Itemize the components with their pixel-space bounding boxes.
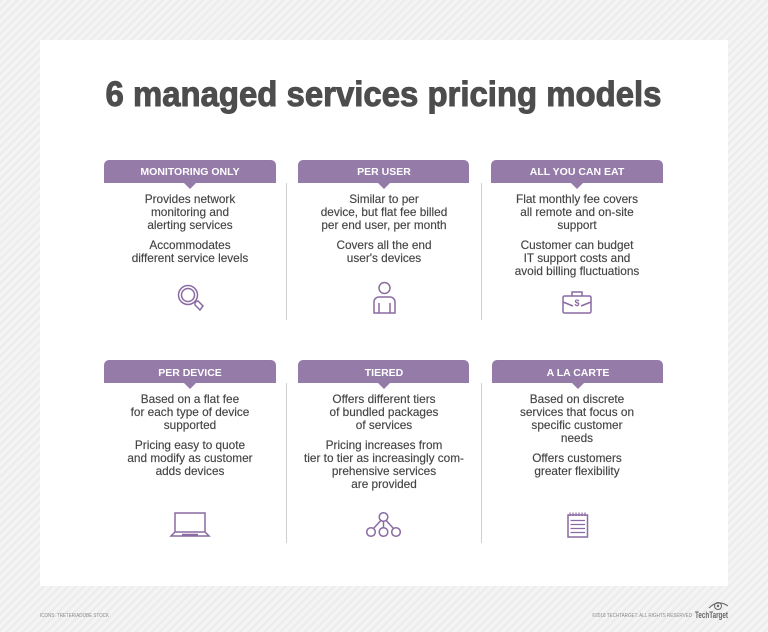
text: all you can eat: support (557, 218, 597, 232)
text: monitoring only: alerting services (147, 218, 233, 232)
logo: TechTarget (695, 602, 729, 621)
text: monitoring only (132, 192, 248, 265)
text: per device: for each type of device (131, 405, 250, 419)
panel: tiered (298, 360, 469, 536)
panel: all you can eat (491, 160, 663, 313)
header: per device: PER DEVICE (158, 367, 222, 379)
icon: laptop (171, 513, 209, 536)
text: monitoring only: Accommodates (149, 238, 231, 252)
header: all you can eat: ALL YOU CAN EAT (530, 166, 625, 178)
text: tiered: Offers different tiers (332, 392, 436, 406)
text: a la carte (520, 392, 634, 478)
icon: notepad (568, 512, 588, 537)
credit: copyright: ©2018 TECHTARGET. ALL RIGHTS RESERVED (592, 612, 692, 619)
logo: TechTarget: TechTarget (695, 610, 729, 621)
text: per user (321, 192, 447, 265)
icon: hierarchy (367, 513, 400, 536)
text: per device: Pricing easy to quote (135, 438, 246, 452)
text: tiered: Pricing increases from (326, 438, 443, 452)
header: tiered (298, 360, 469, 389)
panel: per device (104, 360, 276, 536)
text: a la carte: needs (561, 431, 593, 445)
text: tiered (304, 392, 464, 491)
header: monitoring only: MONITORING ONLY (140, 166, 240, 178)
title: 6 managed services pricing models (106, 75, 662, 114)
header: all you can eat (491, 160, 663, 189)
text: per user: user's devices (347, 251, 421, 265)
text: tiered: tier to tier as increasingly com- (304, 451, 464, 465)
text: a la carte: Based on discrete (530, 392, 625, 406)
icon: person (374, 282, 395, 313)
panel: main card (40, 40, 728, 586)
header: per user (298, 160, 469, 189)
panel: a la carte (492, 360, 663, 537)
text: monitoring only: different service levels (132, 251, 248, 265)
header: tiered: TIERED (365, 367, 404, 379)
text: monitoring only: monitoring and (151, 205, 229, 219)
text: all you can eat: IT support costs and (524, 251, 630, 265)
header: per user: PER USER (357, 166, 411, 178)
panel: monitoring only (104, 160, 276, 310)
text: tiered: of bundled packages (330, 405, 439, 419)
text: all you can eat: Customer can budget (521, 238, 634, 252)
text: per user: Similar to per (349, 192, 419, 206)
text: a la carte: services that focus on (520, 405, 634, 419)
text: tiered: prehensive services (332, 464, 436, 478)
text: all you can eat: avoid billing fluctuations (515, 264, 639, 278)
text: per device: and modify as customer (127, 451, 253, 465)
icon: briefcase with dollar (563, 292, 591, 313)
panel: per user (298, 160, 469, 313)
text: all you can eat: Flat monthly fee covers (516, 192, 638, 206)
header: per device (104, 360, 276, 389)
text: per device: supported (164, 418, 216, 432)
text: per device: adds devices (156, 464, 225, 478)
text: a la carte: specific customer (531, 418, 623, 432)
text: per user: device, but flat fee billed (321, 205, 447, 219)
text: monitoring only: Provides network (145, 192, 235, 206)
header: a la carte (492, 360, 663, 389)
icon: briefcase with dollar: $ (574, 298, 580, 308)
text: a la carte: Offers customers (532, 451, 622, 465)
text: per device (127, 392, 253, 478)
text: per device: Based on a flat fee (141, 392, 240, 406)
text: a la carte: greater flexibility (534, 464, 620, 478)
text: tiered: of services (356, 418, 412, 432)
icon: magnifying glass (178, 286, 203, 310)
credit: icons: ICONS: TRETER/ADOBE STOCK (40, 613, 109, 619)
text: tiered: are provided (351, 477, 417, 491)
header: monitoring only (104, 160, 276, 189)
text: all you can eat (515, 192, 639, 278)
text: per user: Covers all the end (336, 238, 432, 252)
text: all you can eat: all remote and on-site (520, 205, 634, 219)
header: a la carte: A LA CARTE (547, 367, 609, 379)
text: per user: per end user, per month (321, 218, 447, 232)
